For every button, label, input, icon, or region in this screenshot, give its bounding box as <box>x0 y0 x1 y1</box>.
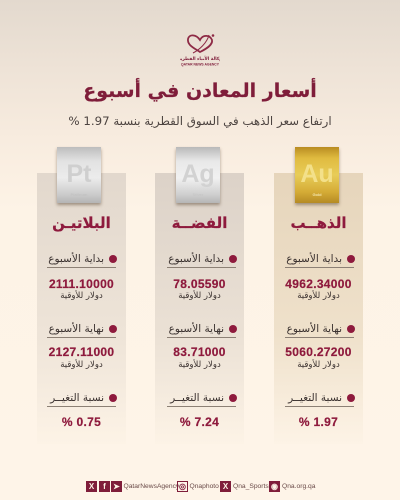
gold column values <box>285 252 355 429</box>
icon: platinum bar: Pt <box>66 160 92 188</box>
heading: gold: الذهــب <box>290 214 346 232</box>
icon: gold bar <box>295 147 339 203</box>
panel: gold <box>274 173 363 444</box>
silver column values: بداية الأسبوع <box>168 253 224 265</box>
icon: platinum bar <box>57 147 101 203</box>
footer: social links <box>86 481 316 492</box>
footer: social links: ➤ <box>113 482 120 491</box>
footer: social links: Qna_Sports <box>233 483 269 490</box>
footer: social links: Qnaphoto <box>190 483 219 490</box>
icon: silver bar: Ag <box>181 160 215 188</box>
logo: Qatar News Agency: QATAR NEWS AGENCY <box>181 62 220 66</box>
icon: gold bar: Au <box>300 160 334 188</box>
icon: silver bar <box>176 147 220 203</box>
gold column values: دولار للأوقية <box>297 360 340 370</box>
silver column values <box>167 252 237 429</box>
icon: silver bar: Silver <box>193 192 203 197</box>
platinum column values: 2111.10000 <box>49 277 114 291</box>
silver column values: دولار للأوقية <box>178 291 221 301</box>
silver column values: دولار للأوقية <box>178 360 221 370</box>
heading: platinum: البلاتيـن <box>52 214 111 232</box>
icon: gold bar: Gold <box>312 192 322 197</box>
platinum column values: دولار للأوقية <box>60 291 103 301</box>
footer: social links: ◉ <box>271 482 278 491</box>
platinum column values: بداية الأسبوع <box>48 253 104 265</box>
silver column values: % 7.24 <box>180 415 219 429</box>
icon: platinum bar: Platinum <box>71 192 87 197</box>
platinum column values: % 0.75 <box>62 415 101 429</box>
platinum column values: 2127.11000 <box>49 345 114 359</box>
gold column values: نسبة التغيــر <box>288 392 342 404</box>
gold column values: بداية الأسبوع <box>286 253 342 265</box>
footer: social links: X <box>223 482 228 491</box>
footer: social links: X <box>89 482 94 491</box>
heading: silver: الفضــة <box>172 214 227 232</box>
gold column values: 5060.27200 <box>285 345 352 359</box>
silver column values: 78.05590 <box>173 277 226 291</box>
logo: Qatar News Agency <box>180 34 220 66</box>
platinum column values <box>47 252 117 429</box>
subtitle: ارتفاع سعر الذهب في السوق القطرية بنسبة 1.97 % <box>68 114 332 128</box>
gold column values: % 1.97 <box>299 415 338 429</box>
platinum column values: نهاية الأسبوع <box>49 323 104 335</box>
footer: social links: Qna.org.qa <box>282 483 315 490</box>
silver column values: 83.71000 <box>173 345 226 359</box>
gold column values: دولار للأوقية <box>297 291 340 301</box>
footer: social links: QatarNewsAgency <box>124 483 179 490</box>
footer: social links: ◎ <box>179 482 186 491</box>
panel: platinum <box>37 173 126 444</box>
gold column values: 4962.34000 <box>285 277 352 291</box>
silver column values: نهاية الأسبوع <box>169 323 224 335</box>
platinum column values: نسبة التغيــر <box>50 392 104 404</box>
silver column values: نسبة التغيــر <box>170 392 224 404</box>
platinum column values: دولار للأوقية <box>60 360 103 370</box>
panel: silver <box>155 173 244 444</box>
footer: social links: f <box>103 482 106 491</box>
gold column values: نهاية الأسبوع <box>287 323 342 335</box>
title: أسعار المعادن في أسبوع <box>83 80 317 102</box>
